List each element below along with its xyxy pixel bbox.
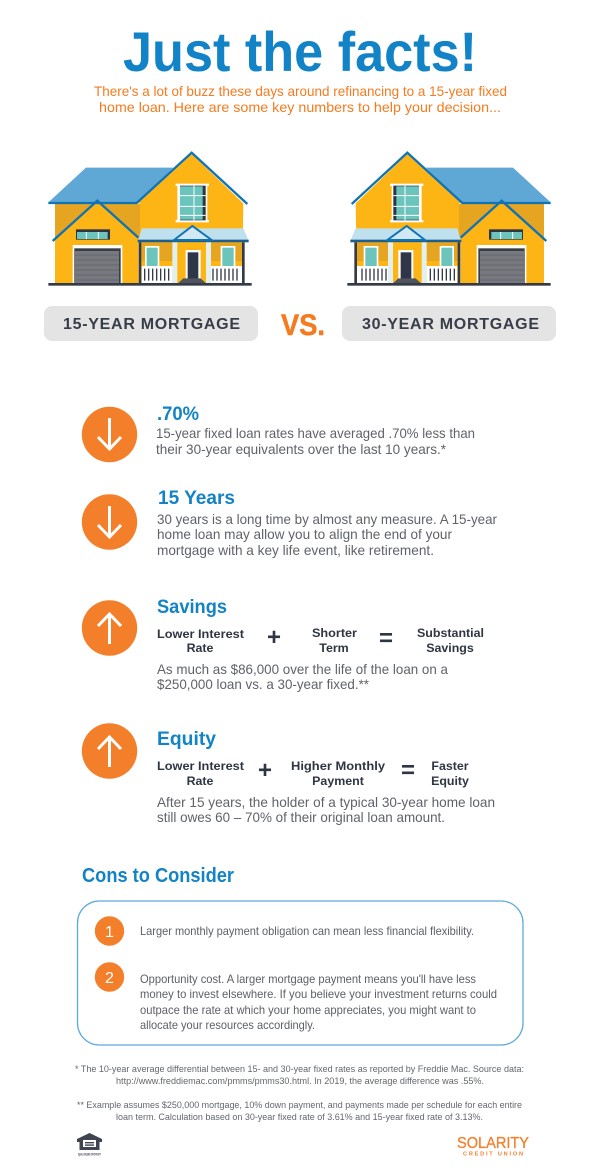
equation: Substantial xyxy=(417,626,484,640)
text xyxy=(157,512,497,558)
text: mortgage with a key life event, like retirement. xyxy=(157,543,434,558)
text xyxy=(157,662,448,692)
subtitle xyxy=(94,84,507,115)
con 1: 1 xyxy=(105,924,114,941)
label: 15-year mortgage: 15-YEAR MORTGAGE xyxy=(63,316,240,333)
equation: Lower Interest xyxy=(157,627,244,641)
logo: Solarity Credit Union: CREDIT UNION xyxy=(463,1152,523,1158)
heading: Savings xyxy=(157,597,227,618)
equation: Equity xyxy=(431,774,469,788)
icon: equal housing opportunity xyxy=(77,1133,102,1156)
text: home loan may allow you to align the end of your xyxy=(157,527,452,542)
icon: up arrow xyxy=(82,600,137,656)
text xyxy=(157,795,495,825)
text: 15-year fixed loan rates have averaged .70% less than xyxy=(156,426,475,441)
con 2: money to invest elsewhere. If you believe your investment returns could xyxy=(140,987,497,1001)
equation xyxy=(157,757,469,788)
illustration: 15-year house xyxy=(48,153,252,286)
icon: up arrow xyxy=(82,723,137,779)
heading: 15 Years xyxy=(158,488,235,509)
equation: + xyxy=(258,757,272,784)
illustration: 30-year house xyxy=(347,153,551,286)
equation: Rate xyxy=(187,774,214,788)
equation: = xyxy=(379,625,393,652)
text: After 15 years, the holder of a typical 30-year home loan xyxy=(157,795,495,810)
heading: .70% xyxy=(157,404,199,425)
equation xyxy=(157,624,484,655)
equation: = xyxy=(401,757,415,784)
footnotes: * The 10-year average differential between 15- and 30-year fixed rates as reported by Freddie Mac. Source data: xyxy=(75,1064,524,1074)
text: As much as $86,000 over the life of the loan on a xyxy=(157,662,448,677)
subtitle: home loan. Here are some key numbers to help your decision... xyxy=(99,100,501,115)
title: Just the facts! xyxy=(123,20,477,83)
text: $250,000 loan vs. a 30-year fixed.** xyxy=(157,677,370,692)
equation: Faster xyxy=(431,759,469,773)
equation: Shorter xyxy=(312,626,357,640)
equation: + xyxy=(267,624,281,651)
heading: Equity xyxy=(157,729,216,750)
subtitle: There's a lot of buzz these days around refinancing to a 15-year fixed xyxy=(94,84,507,99)
label: 15-year mortgage xyxy=(44,306,258,341)
equation: Rate xyxy=(187,641,214,655)
label: 30-year mortgage: 30-YEAR MORTGAGE xyxy=(362,316,539,333)
label: 30-year mortgage xyxy=(342,306,556,341)
con 2 xyxy=(95,962,497,1032)
con 2: 2 xyxy=(105,970,114,987)
heading: cons to consider: Cons to Consider xyxy=(82,865,234,887)
versus label: VS. xyxy=(281,309,325,342)
fact: 15 years xyxy=(82,488,497,558)
con 2: allocate your resources accordingly. xyxy=(140,1018,315,1032)
footnotes: http://www.freddiemac.com/pmms/pmms30.html. In 2019, the average difference was .55%. xyxy=(116,1076,484,1086)
equation: Savings xyxy=(426,641,474,655)
icon: down arrow xyxy=(82,494,137,550)
text: 30 years is a long time by almost any measure. A 15-year xyxy=(157,512,497,527)
logo: Solarity Credit Union: SOLARITY xyxy=(457,1135,529,1152)
text xyxy=(156,426,475,457)
panel: cons xyxy=(78,901,523,1045)
equation: Payment xyxy=(312,774,364,788)
con 1: Larger monthly payment obligation can mean less financial flexibility. xyxy=(140,924,474,938)
icon: down arrow xyxy=(82,407,137,462)
footnotes: ** Example assumes $250,000 mortgage, 10% down payment, and payments made per schedule for each entire xyxy=(77,1100,522,1110)
fact: equity xyxy=(82,723,495,825)
con 2: outpace the rate at which your home appreciates, you might want to xyxy=(140,1003,476,1017)
con 1 xyxy=(95,916,474,946)
text: their 30-year equivalents over the last 10 years.* xyxy=(156,442,447,457)
equation: Lower Interest xyxy=(157,759,244,773)
infographic: EQUAL HOUSING OPPORTUNITY xyxy=(78,1152,101,1156)
equation: Higher Monthly xyxy=(291,759,385,773)
fact: savings xyxy=(82,597,484,692)
footnotes: loan term. Calculation based on 30-year fixed rate of 3.61% and 15-year fixed rate of 3.13%. xyxy=(116,1112,483,1122)
fact: .70% xyxy=(82,404,475,462)
equation: Term xyxy=(319,641,349,655)
footnotes xyxy=(75,1064,524,1122)
text: still owes 60 – 70% of their original loan amount. xyxy=(157,810,445,825)
con 2: Opportunity cost. A larger mortgage payment means you'll have less xyxy=(140,972,476,986)
